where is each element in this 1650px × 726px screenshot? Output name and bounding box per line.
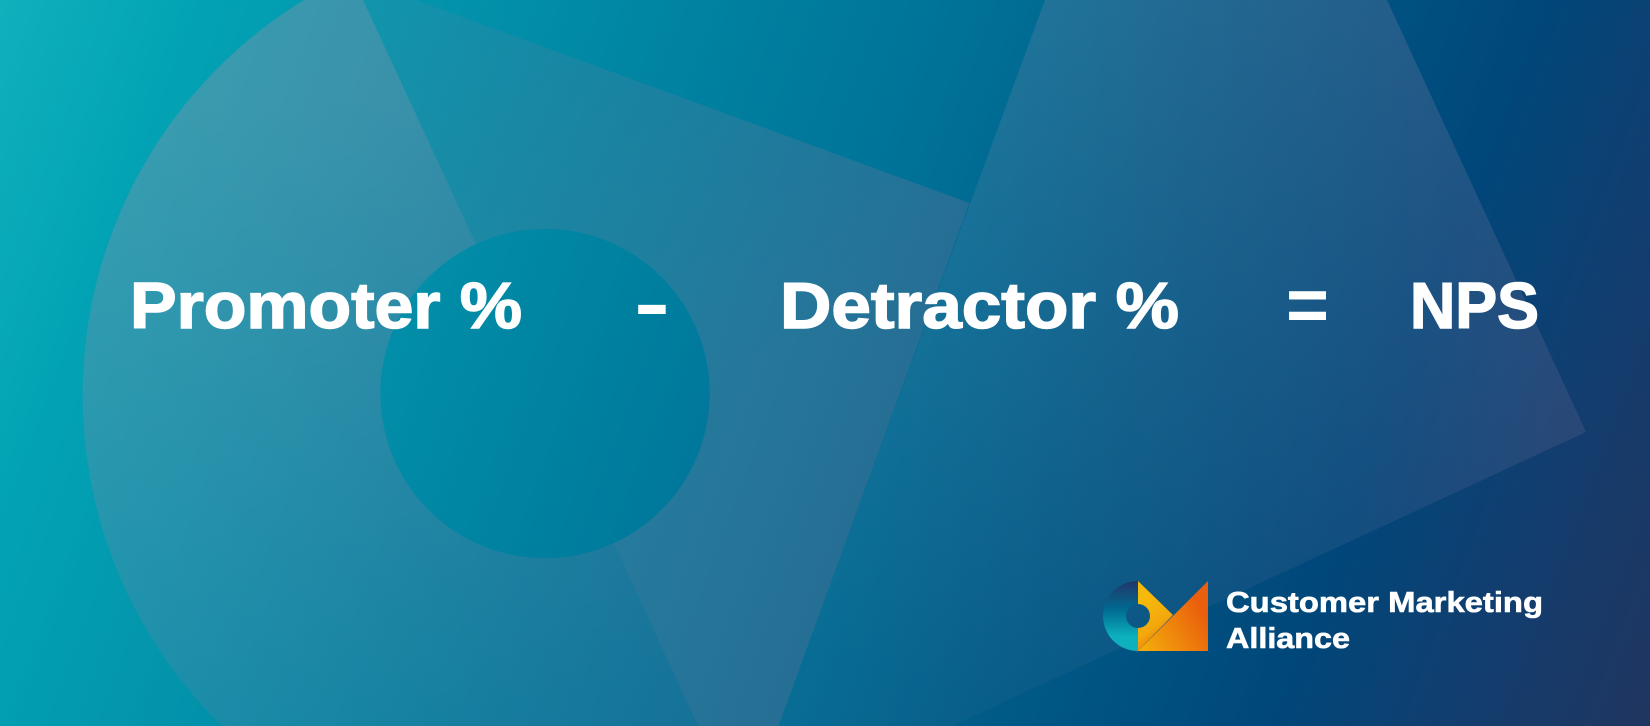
logo wordmark: Customer Marketing [1226, 587, 1543, 619]
term: promoter: Promoter % [130, 269, 522, 342]
term: detractor: Detractor % [780, 269, 1179, 342]
decorative shape: circle sector [83, 0, 698, 726]
logo mark [1103, 581, 1208, 651]
decorative shape: rotated square [778, 0, 1586, 726]
logo: Customer Marketing Alliance [1103, 581, 1543, 655]
operator: minus: - [634, 261, 670, 346]
logo wordmark [1226, 587, 1543, 655]
logo wordmark: Alliance [1226, 623, 1350, 655]
operator: equals: = [1286, 263, 1329, 348]
result: NPS: NPS [1410, 269, 1539, 342]
decorative shape: centre wedge [363, 0, 969, 726]
formula heading [130, 261, 1539, 348]
